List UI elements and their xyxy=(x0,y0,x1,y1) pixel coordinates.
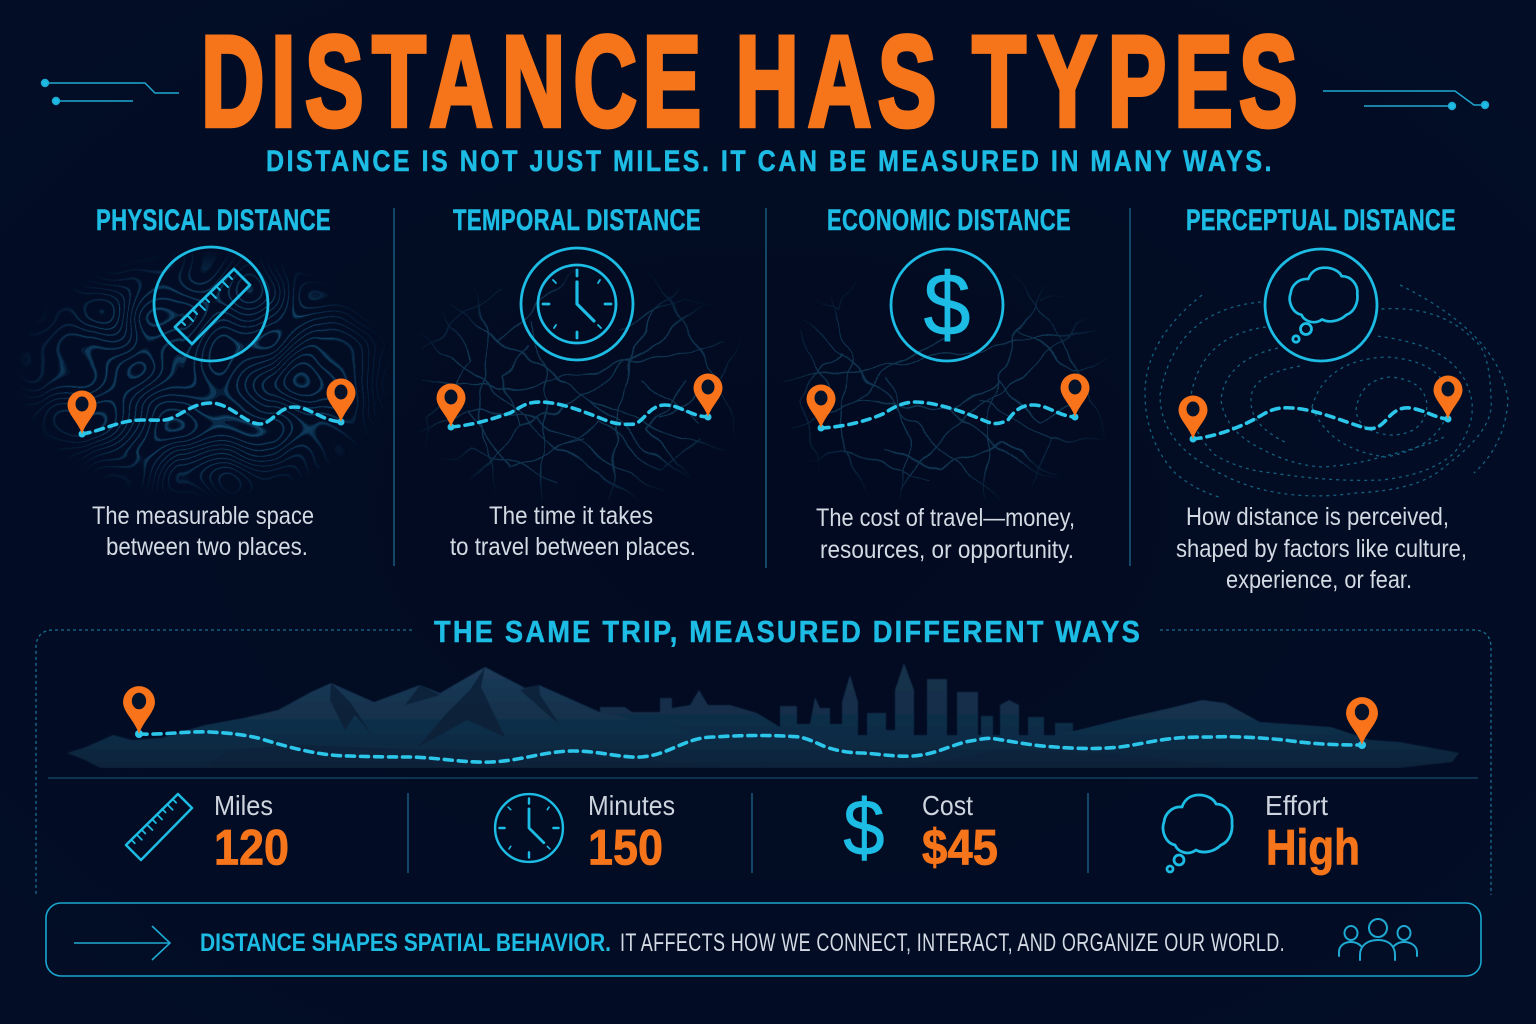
stat: cost: Cost xyxy=(922,790,973,821)
route with pins xyxy=(806,374,1090,432)
icon: people xyxy=(1339,919,1417,960)
divider 3 xyxy=(1129,208,1131,566)
panel: same trip comparison xyxy=(36,614,1491,895)
description: How distance is perceived, xyxy=(1186,503,1449,531)
road network background xyxy=(421,268,738,500)
stat: cost: $45 xyxy=(922,820,998,876)
heading: ECONOMIC DISTANCE xyxy=(827,204,1071,237)
description xyxy=(816,504,1075,564)
banner text: IT AFFECTS HOW WE CONNECT, INTERACT, AND ORGANIZE OUR WORLD. xyxy=(620,929,1285,957)
stat: miles xyxy=(126,790,289,876)
description: to travel between places. xyxy=(450,533,696,561)
icon: ruler xyxy=(154,247,268,361)
landscape silhouette xyxy=(67,663,1459,768)
dotted perception rings xyxy=(1145,285,1508,497)
description xyxy=(1176,503,1467,594)
description xyxy=(92,502,314,561)
takeaway banner xyxy=(46,903,1481,976)
title: DISTANCE HAS TYPES xyxy=(201,10,1298,154)
heading: PHYSICAL DISTANCE xyxy=(96,204,331,237)
route with pins xyxy=(123,686,1378,762)
divider 2 xyxy=(765,208,767,568)
circuit decoration: left xyxy=(42,80,179,104)
description: The time it takes xyxy=(489,502,653,530)
icon: dollar: $ xyxy=(923,255,971,354)
route with pins xyxy=(1178,376,1462,442)
section heading: THE SAME TRIP, MEASURED DIFFERENT WAYS xyxy=(434,614,1142,649)
description: shaped by factors like culture, xyxy=(1176,535,1467,563)
stat: effort xyxy=(1163,790,1360,876)
stat: minutes: Minutes xyxy=(588,790,675,821)
stat: cost: $ xyxy=(843,784,885,873)
heading: TEMPORAL DISTANCE xyxy=(453,204,701,237)
stat: effort: Effort xyxy=(1265,790,1328,821)
icon: thought cloud xyxy=(1265,249,1377,361)
icon: dollar xyxy=(891,249,1003,361)
description: The cost of travel—money, xyxy=(816,504,1075,532)
description: experience, or fear. xyxy=(1226,566,1412,594)
description xyxy=(450,502,696,561)
panel: economic distance xyxy=(770,204,1115,564)
description: resources, or opportunity. xyxy=(820,536,1074,564)
icon: clock xyxy=(521,248,633,360)
stat: miles: 120 xyxy=(214,820,289,876)
stat: effort: High xyxy=(1266,820,1360,876)
route with pins xyxy=(436,374,722,430)
route with pins xyxy=(68,378,356,438)
circuit decoration: right xyxy=(1323,91,1488,110)
panel: temporal distance xyxy=(400,204,745,561)
contour map background xyxy=(24,256,386,494)
stat: miles: Miles xyxy=(214,790,273,821)
stat: minutes: 150 xyxy=(588,820,663,876)
stat: minutes xyxy=(495,790,675,876)
description: The measurable space xyxy=(92,502,314,530)
panel: perceptual distance xyxy=(1145,204,1508,594)
road network background xyxy=(784,279,1108,498)
banner text bold: DISTANCE SHAPES SPATIAL BEHAVIOR. xyxy=(200,929,611,957)
stat: cost xyxy=(843,784,998,876)
panel: physical distance xyxy=(24,209,386,560)
description: between two places. xyxy=(106,533,308,561)
icon: arrow xyxy=(74,926,170,960)
divider 1 xyxy=(393,208,395,566)
subtitle: DISTANCE IS NOT JUST MILES. IT CAN BE MEASURED IN MANY WAYS. xyxy=(266,145,1274,178)
